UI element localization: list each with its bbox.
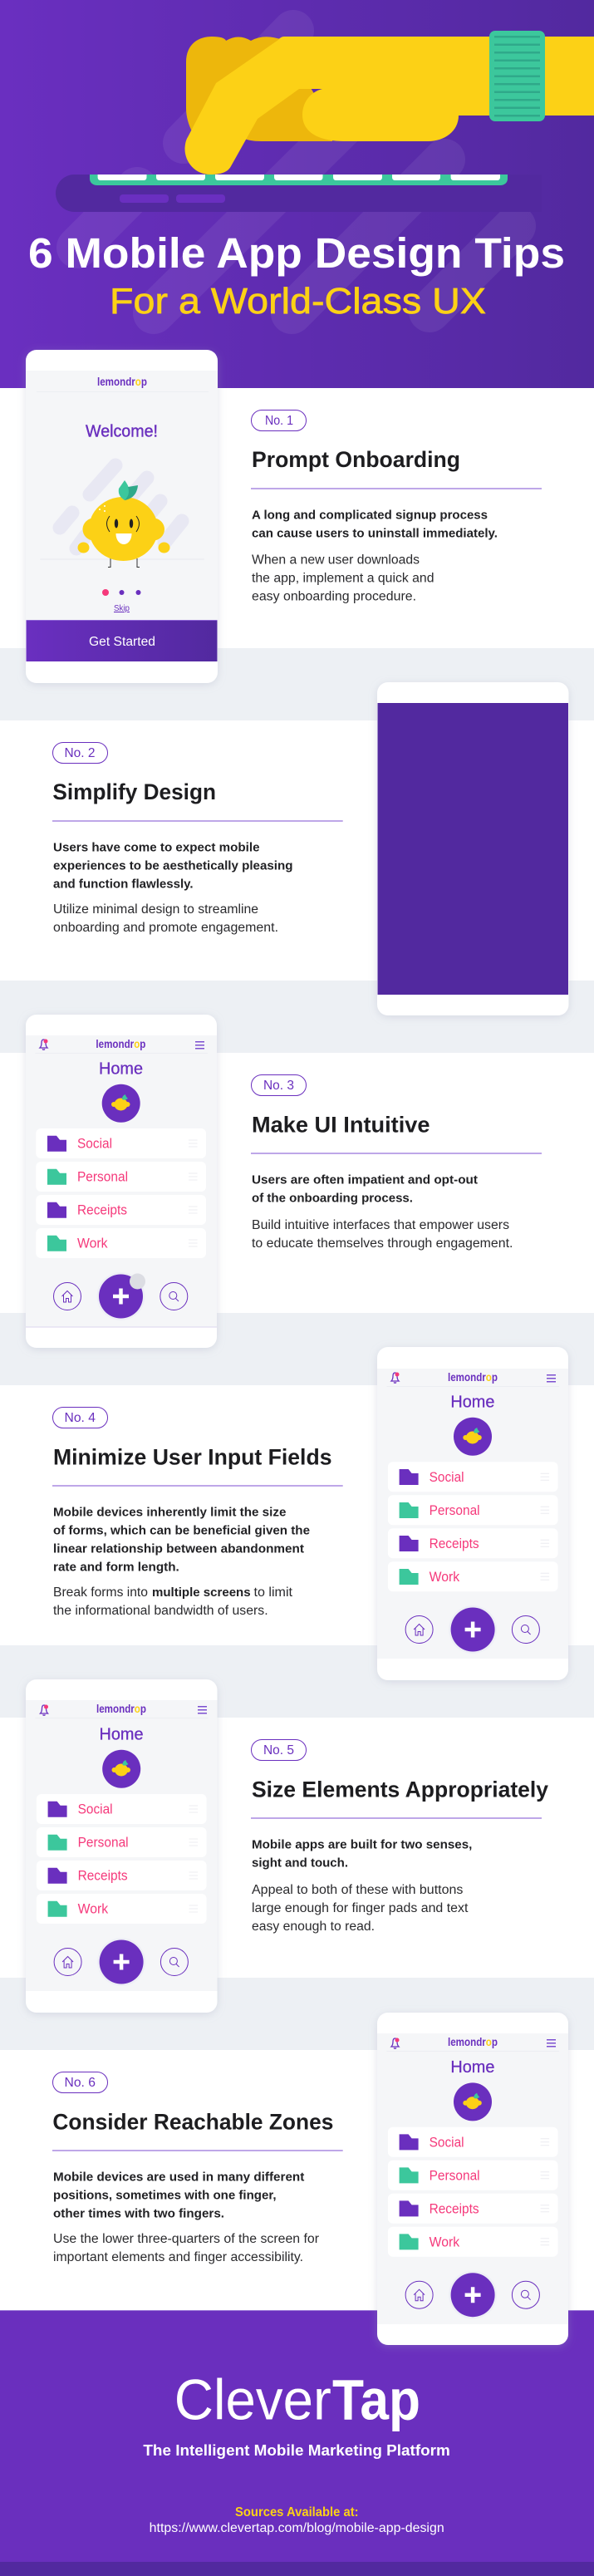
tip 6 text block bbox=[52, 2072, 343, 2264]
body text: Use the lower three-quarters of the screen for bbox=[53, 2232, 319, 2246]
tip 4 text block bbox=[52, 1408, 343, 1618]
nav: home, add, search buttons bbox=[54, 1938, 188, 1986]
body text: sight and touch. bbox=[252, 1856, 348, 1870]
list: folders bbox=[388, 2127, 558, 2257]
section background bands bbox=[0, 388, 594, 2310]
body text bbox=[53, 840, 292, 935]
body text: When a new user downloads bbox=[252, 553, 420, 568]
body text: Users are often impatient and opt-out bbox=[252, 1172, 478, 1187]
icon: menu bbox=[195, 1041, 204, 1049]
heading: Home: Home bbox=[100, 1726, 143, 1744]
body text: large enough for finger pads and text bbox=[252, 1901, 469, 1915]
body text: rate and form length. bbox=[53, 1560, 179, 1574]
heading: Simplify Design: Simplify Design bbox=[52, 779, 216, 804]
nav: home, add, search buttons bbox=[405, 2271, 539, 2319]
body text: linear relationship between abandonment bbox=[53, 1541, 304, 1556]
body text: to educate themselves through engagement. bbox=[252, 1236, 513, 1251]
list: folders: Personal bbox=[77, 1170, 128, 1185]
icon: bell bbox=[40, 1705, 48, 1715]
list: folders: Personal bbox=[78, 1836, 129, 1851]
badge: No. 5: No. 5 bbox=[263, 1743, 294, 1757]
panel: footer bbox=[0, 2310, 594, 2576]
logo: lemondrop: lemondrop bbox=[448, 1371, 498, 1384]
panel: header bbox=[0, 0, 594, 388]
badge: No. 1: No. 1 bbox=[265, 414, 293, 428]
logo: lemondrop: lemondrop bbox=[448, 2036, 498, 2048]
badge: No. 6 bbox=[53, 2072, 108, 2092]
tip 1 text block bbox=[251, 410, 542, 604]
heading: Home: Home bbox=[450, 2058, 494, 2077]
body text: easy onboarding procedure. bbox=[252, 590, 416, 604]
heading: Size Elements Appropriately: Size Elements Appropriately bbox=[252, 1777, 548, 1802]
link: Skip: Skip bbox=[114, 603, 130, 613]
body text: Build intuitive interfaces that empower users bbox=[252, 1218, 509, 1232]
nav: home, add, search buttons bbox=[405, 1605, 539, 1654]
badge: No. 3: No. 3 bbox=[263, 1079, 294, 1093]
body text: multiple screens bbox=[152, 1585, 251, 1600]
body text bbox=[53, 1505, 310, 1618]
subtitle: For a World-Class UX bbox=[110, 281, 486, 322]
tip 2 text block bbox=[52, 743, 343, 935]
title: 6 Mobile App Design Tips bbox=[28, 229, 565, 277]
tagline: The Intelligent Mobile Marketing Platform bbox=[143, 2441, 450, 2459]
heading: Welcome: Welcome! bbox=[86, 422, 158, 440]
sources url: https://www.clevertap.com/blog/mobile-app-design bbox=[150, 2521, 444, 2535]
illustration: lemon mascot bbox=[40, 465, 204, 567]
heading: Home: Home bbox=[450, 1394, 494, 1412]
heading: Minimize User Input Fields: Minimize User Input Fields bbox=[53, 1444, 332, 1469]
icon: menu bbox=[198, 1706, 207, 1713]
list: folders bbox=[388, 1462, 558, 1591]
badge: No. 2: No. 2 bbox=[65, 746, 95, 760]
icon: phone keyboard edge bbox=[56, 175, 542, 212]
heading: Prompt Onboarding: Prompt Onboarding bbox=[252, 447, 460, 472]
phone: solid purple screen bbox=[377, 682, 568, 1015]
list: folders: Work bbox=[430, 2234, 460, 2249]
badge: No. 6: No. 6 bbox=[65, 2076, 96, 2090]
list: folders: Personal bbox=[430, 1503, 480, 1518]
badge: No. 5 bbox=[251, 1740, 306, 1760]
body text bbox=[252, 1837, 472, 1934]
badge: No. 2 bbox=[53, 743, 108, 763]
logo: lemondrop: lemondrop bbox=[97, 376, 147, 388]
body text: Break forms into bbox=[53, 1585, 148, 1600]
heading: Consider Reachable Zones: Consider Reachable Zones bbox=[52, 2109, 333, 2134]
heading: Make UI Intuitive: Make UI Intuitive bbox=[252, 1112, 430, 1137]
badge: No. 1 bbox=[251, 410, 306, 430]
list: folders: Receipts bbox=[78, 1869, 128, 1884]
avatar: lemon bbox=[102, 1750, 140, 1788]
list: folders: Social bbox=[78, 1802, 113, 1817]
icon: bell bbox=[391, 1373, 399, 1383]
list: folders: Work bbox=[78, 1902, 109, 1917]
body text: A long and complicated signup process bbox=[252, 508, 488, 522]
body text: Mobile apps are built for two senses, bbox=[252, 1837, 472, 1851]
body text: positions, sometimes with one finger, bbox=[53, 2188, 277, 2202]
sources label: Sources Available at: bbox=[235, 2505, 359, 2519]
button: Get Started: Get Started bbox=[89, 635, 155, 649]
body text: Appeal to both of these with buttons bbox=[252, 1883, 464, 1897]
logo: CleverTap: Clever bbox=[174, 2368, 331, 2432]
icon: bell bbox=[391, 2038, 399, 2048]
badge: No. 4 bbox=[53, 1408, 108, 1428]
body text: easy enough to read. bbox=[252, 1920, 375, 1934]
body text: Users have come to expect mobile bbox=[53, 840, 259, 854]
logo: CleverTap bbox=[174, 2368, 420, 2432]
body text: experiences to be aesthetically pleasing bbox=[53, 858, 292, 873]
phone: home screen (tip 3) bbox=[26, 1015, 217, 1348]
body text: Utilize minimal design to streamline bbox=[53, 902, 258, 917]
badge: No. 3 bbox=[251, 1075, 306, 1095]
list: folders bbox=[37, 1794, 207, 1924]
list: folders: Social bbox=[430, 2135, 464, 2150]
body text: can cause users to uninstall immediately. bbox=[252, 526, 498, 540]
list: folders: Receipts bbox=[430, 1536, 479, 1551]
body text bbox=[53, 2170, 319, 2264]
body text: and function flawlessly. bbox=[53, 877, 194, 891]
avatar: lemon bbox=[454, 1418, 492, 1456]
button: Get Started bbox=[27, 620, 218, 661]
body text: Mobile devices inherently limit the size bbox=[53, 1505, 286, 1519]
list: folders: Work bbox=[77, 1236, 108, 1251]
body text: of forms, which can be beneficial given the bbox=[53, 1523, 310, 1537]
phone: home screen (tip 6) bbox=[377, 2013, 568, 2345]
heading: Home: Home bbox=[99, 1060, 143, 1079]
tip 5 text block bbox=[251, 1740, 548, 1934]
icon: hand pressing phone bbox=[184, 31, 594, 175]
list: folders: Receipts bbox=[77, 1203, 127, 1218]
body text: the app, implement a quick and bbox=[252, 572, 434, 586]
icon: green wristband bbox=[489, 31, 545, 121]
body text bbox=[252, 1172, 513, 1251]
body text: important elements and finger accessibility. bbox=[53, 2250, 303, 2264]
body text: to limit bbox=[254, 1585, 293, 1600]
avatar: lemon bbox=[454, 2082, 492, 2121]
phone: welcome onboarding screen bbox=[26, 350, 218, 683]
body text: of the onboarding process. bbox=[252, 1191, 413, 1205]
nav: home, add, search buttons bbox=[53, 1272, 188, 1320]
list: folders: Personal bbox=[430, 2168, 480, 2183]
phone: home screen (tip 5) bbox=[26, 1679, 218, 2013]
avatar: lemon bbox=[102, 1084, 140, 1123]
body text bbox=[252, 508, 498, 604]
icon: menu bbox=[547, 1374, 556, 1383]
phone: home screen (tip 4) bbox=[377, 1347, 568, 1680]
list: folders: Social bbox=[77, 1137, 112, 1152]
badge: No. 4: No. 4 bbox=[65, 1411, 96, 1425]
logo: CleverTap: Tap bbox=[332, 2368, 420, 2432]
logo: lemondrop: lemondrop bbox=[96, 1703, 146, 1715]
body text: other times with two fingers. bbox=[53, 2206, 224, 2220]
body text: onboarding and promote engagement. bbox=[53, 921, 278, 935]
icon: bell bbox=[40, 1039, 48, 1050]
list: folders: Social bbox=[430, 1470, 464, 1485]
icon: menu bbox=[547, 2039, 556, 2048]
list: folders bbox=[36, 1128, 206, 1258]
tip 3 text block bbox=[251, 1075, 542, 1251]
body text: the informational bandwidth of users. bbox=[53, 1604, 268, 1618]
list: folders: Receipts bbox=[430, 2201, 479, 2216]
pagination dots bbox=[102, 589, 141, 596]
body text: Mobile devices are used in many different bbox=[53, 2170, 304, 2184]
logo: lemondrop: lemondrop bbox=[96, 1038, 145, 1050]
list: folders: Work bbox=[430, 1570, 460, 1585]
